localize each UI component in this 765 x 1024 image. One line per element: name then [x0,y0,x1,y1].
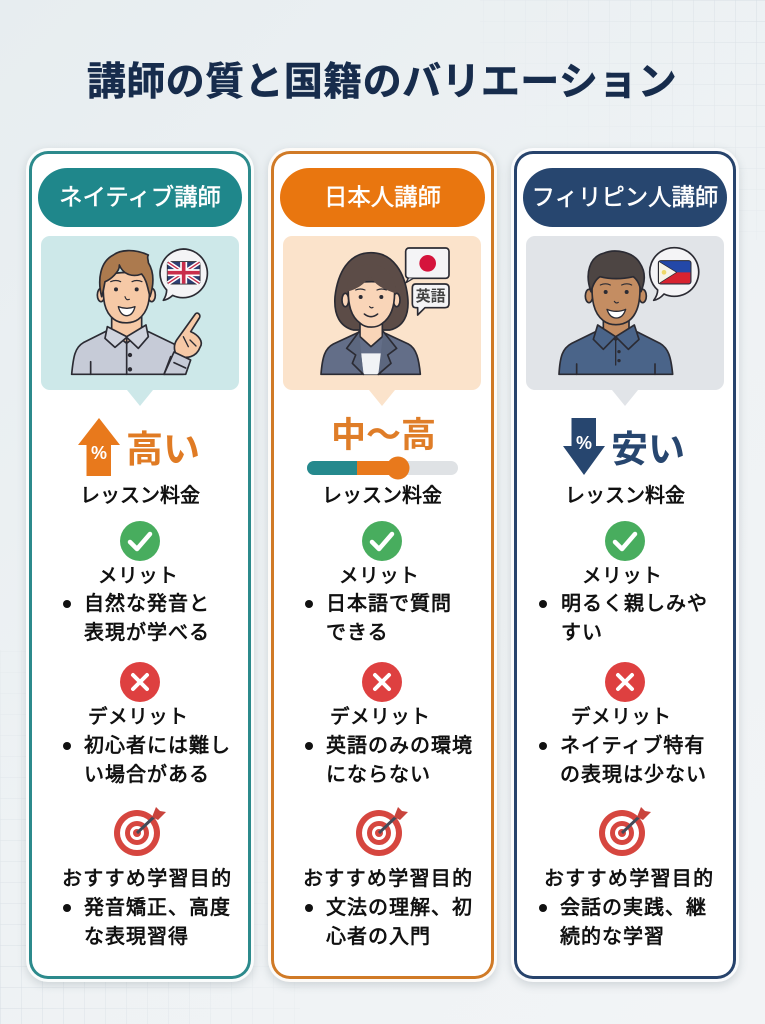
heading: Filipino teacher: フィリピン人講師 [532,184,718,210]
demerit text [63,734,231,786]
price label: レッスン料金 [322,485,442,507]
heading: demerit: デメリット [571,706,672,728]
heading: native teacher: ネイティブ講師 [59,184,221,210]
pointer [612,390,638,406]
heading: demerit: デメリット [88,706,189,728]
merit text [539,592,708,644]
icon: Filipino teacher with flag [558,246,700,376]
demerit text: 初心者には難し [84,735,231,757]
price arrow down [563,418,605,475]
icon: check [120,521,160,561]
heading: demerit: デメリット [330,706,431,728]
demerit text: い場合がある [84,764,210,786]
icon: check [605,521,645,561]
heading: Japanese teacher: 日本人講師 [324,184,441,210]
icon: cross [120,662,160,702]
merit text [63,592,210,644]
heading: Japanese teacher [280,168,485,227]
price arrow up: % [91,443,107,463]
price arrow down: % [576,433,592,453]
demerit text: 英語のみの環境 [326,735,473,757]
recommended goal text [305,896,473,948]
panel: native teacher [29,151,251,979]
heading: merit: メリット [339,565,419,587]
price label: レッスン料金 [565,485,685,507]
pointer [127,390,153,406]
price label: レッスン料金 [80,485,200,507]
heading: Filipino teacher [523,168,727,227]
recommended goal text: 続的な学習 [560,926,665,948]
demerit text: の表現は少ない [560,764,707,786]
recommended goal text: 文法の理解、初 [326,897,473,919]
merit text: 表現が学べる [84,622,210,644]
icon: Japanese teacher with flag: 英語 [416,288,446,305]
recommended goal text [539,896,707,948]
price level: 高い [126,429,200,470]
illustration background [526,236,724,390]
panel: Japanese teacher [271,151,494,979]
merit text: 自然な発音と [84,593,210,615]
icon: check [362,521,402,561]
merit text: 日本語で質問 [326,593,452,615]
title: 講師の質と国籍のバリエーション [87,61,677,104]
icon: Japanese teacher with flag [320,247,450,376]
recommended goal text: 会話の実践、継 [560,897,707,919]
merit text: できる [326,622,389,644]
merit text: 明るく親しみや [561,593,708,615]
illustration background [41,236,239,390]
heading: merit: メリット [582,565,662,587]
demerit text [305,734,473,786]
icon: target [114,807,166,856]
pointer [369,390,395,406]
heading: native teacher [38,168,242,227]
recommended goal text: 心者の入門 [326,926,431,948]
price level: 安い [611,429,685,470]
recommended goal text: な表現習得 [84,926,189,948]
merit text [305,592,452,644]
icon: target [356,807,408,856]
icon: cross [605,662,645,702]
demerit text: にならない [326,764,431,786]
merit text: すい [561,622,603,644]
icon: cross [362,662,402,702]
icon: target [599,807,651,856]
heading: recommended goal: おすすめ学習目的 [544,868,714,890]
panel: Filipino teacher [514,151,736,979]
demerit text: ネイティブ特有 [560,735,705,757]
price slider [307,456,458,480]
illustration background [283,236,481,390]
heading: merit: メリット [98,565,178,587]
heading: recommended goal: おすすめ学習目的 [62,868,232,890]
recommended goal text: 発音矯正、高度 [84,897,231,919]
icon: native teacher with UK flag [70,248,208,376]
price arrow up [78,418,120,476]
heading: recommended goal: おすすめ学習目的 [303,868,473,890]
recommended goal text [63,896,231,948]
price level: 中〜高 [331,416,436,455]
demerit text [539,734,707,786]
